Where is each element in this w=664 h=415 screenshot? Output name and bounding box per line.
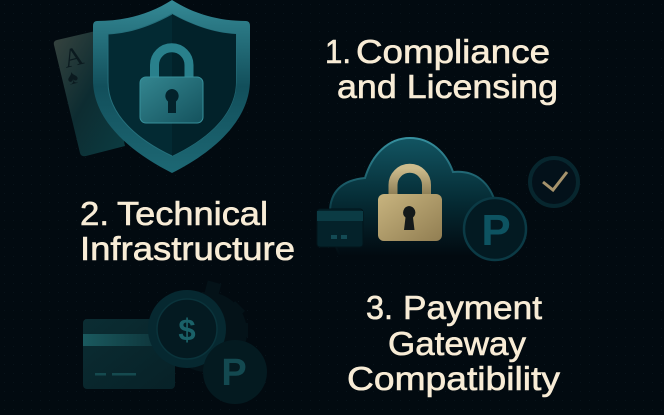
heading: 1. Compliance and Licensing: Compliance [356, 33, 550, 70]
icon: payment group: P [221, 352, 247, 394]
heading: 1. Compliance and Licensing [325, 33, 558, 105]
icon: cloud with gold padlock [330, 138, 496, 256]
card dashes [95, 373, 136, 376]
gold keyhole [403, 206, 415, 230]
card letter A: A [60, 40, 87, 74]
padlock keyhole [165, 89, 179, 113]
heading: 2. Technical Infrastructure [80, 195, 295, 267]
padlock shackle [154, 48, 189, 80]
icon: ace of spades card [54, 30, 125, 156]
padlock body [140, 77, 203, 123]
gear behind chip [167, 281, 248, 372]
heading: 1. Compliance and Licensing: 1. [325, 33, 351, 70]
heading: 3. Payment Gateway Compatibility: 3. [366, 289, 393, 326]
icon: payment group [83, 281, 267, 404]
heading: 2. Technical Infrastructure: 2. [80, 195, 109, 232]
cloud [330, 138, 496, 256]
gold lock body [378, 194, 442, 241]
dollar sign: $ [178, 312, 196, 347]
card stripe [83, 334, 163, 346]
card spade: ♠ [65, 66, 81, 90]
icon: parking coin: P [481, 206, 511, 255]
poker chip [148, 290, 226, 368]
icon: check mark badge [530, 158, 578, 206]
heading: 2. Technical Infrastructure: Technical [117, 195, 268, 232]
heading: 1. Compliance and Licensing: and Licensing [337, 68, 558, 105]
heading: 3. Payment Gateway Compatibility: Gateway [388, 325, 527, 362]
icon: parking coin [464, 198, 526, 260]
heading: 3. Payment Gateway Compatibility [347, 289, 561, 397]
parking coin [203, 340, 267, 404]
icon: shield with padlock [93, 0, 250, 173]
heading: 3. Payment Gateway Compatibility: Compatibility [347, 360, 561, 397]
heading: 2. Technical Infrastructure: Infrastructure [80, 230, 295, 267]
heading: 3. Payment Gateway Compatibility: Payment [403, 289, 542, 326]
credit card [83, 319, 175, 389]
icon: small card [317, 209, 363, 247]
gold shackle [393, 168, 426, 198]
